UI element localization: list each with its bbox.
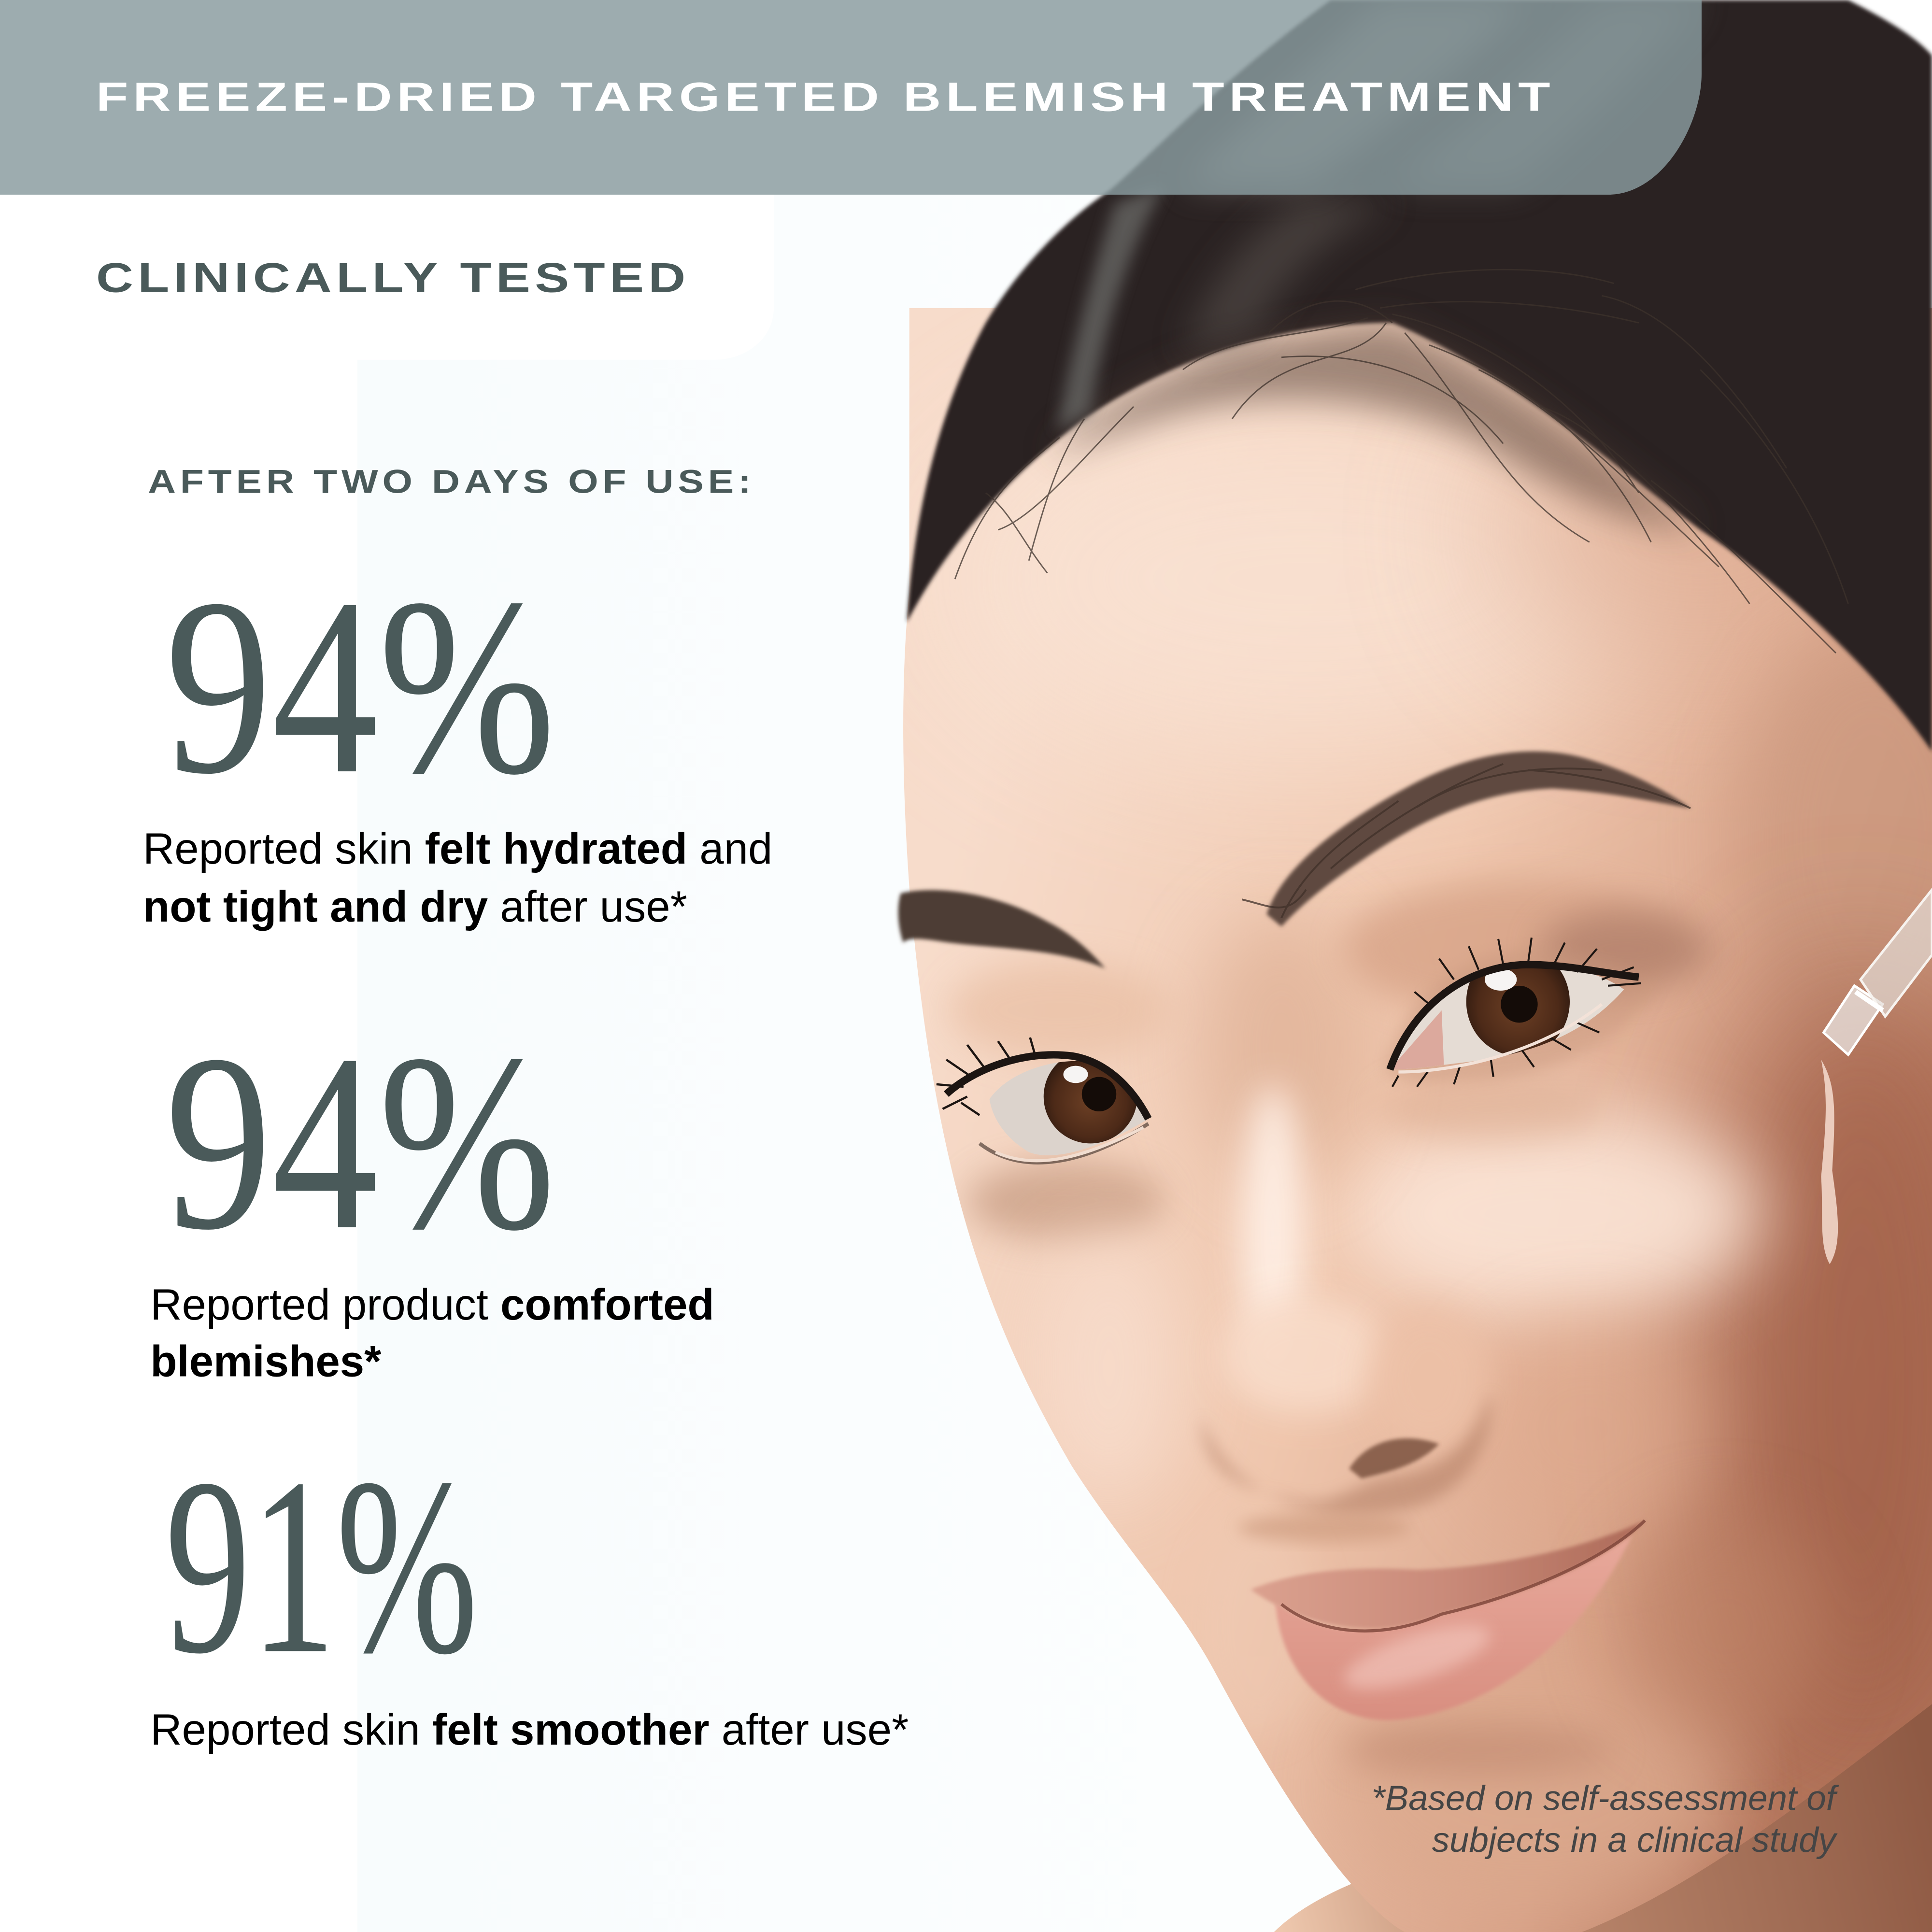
stat 1 description: Reported skin felt hydrated and bbox=[143, 824, 772, 873]
hair bbox=[907, 0, 1932, 752]
lips bbox=[1250, 1520, 1645, 1720]
stat 2 number: 94% bbox=[165, 1003, 556, 1282]
stat 2 description bbox=[150, 1280, 714, 1386]
portrait of woman bbox=[863, 0, 1932, 1932]
stat 1 bbox=[143, 547, 772, 931]
banner bbox=[0, 0, 1702, 195]
stat 1 description bbox=[143, 824, 772, 931]
stat 2 bbox=[150, 1003, 714, 1386]
stat 1 description: not tight and dry after use* bbox=[143, 882, 687, 931]
right eye bbox=[1384, 938, 1657, 1087]
left eye bbox=[937, 1037, 1149, 1163]
stat 2 description: Reported product comforted bbox=[150, 1280, 714, 1329]
stat 3 description: Reported skin felt smoother after use* bbox=[150, 1705, 909, 1754]
banner title: FREEZE-DRIED TARGETED BLEMISH TREATMENT bbox=[96, 74, 1555, 120]
stat 1 number: 94% bbox=[165, 547, 556, 826]
face bbox=[863, 296, 1932, 1932]
stat 3 bbox=[150, 1426, 909, 1754]
footnote bbox=[1371, 1778, 1839, 1860]
white panel behind clinically tested bbox=[0, 195, 774, 360]
footnote: *Based on self-assessment of bbox=[1371, 1778, 1839, 1818]
subheading: after two days of use: AFTER TWO DAYS OF USE: bbox=[148, 463, 755, 500]
dropper and serum bbox=[1821, 890, 1932, 1264]
nose bbox=[1201, 1084, 1492, 1543]
heading: clinically tested: CLINICALLY TESTED bbox=[96, 255, 690, 301]
footnote: subjects in a clinical study bbox=[1432, 1820, 1838, 1860]
stat 3 number: 91% bbox=[165, 1426, 478, 1706]
left eyebrow bbox=[898, 890, 1105, 968]
stat 2 description: blemishes* bbox=[150, 1337, 382, 1386]
right eyebrow bbox=[1242, 752, 1690, 926]
neck and shoulder bbox=[1274, 1688, 1932, 1932]
